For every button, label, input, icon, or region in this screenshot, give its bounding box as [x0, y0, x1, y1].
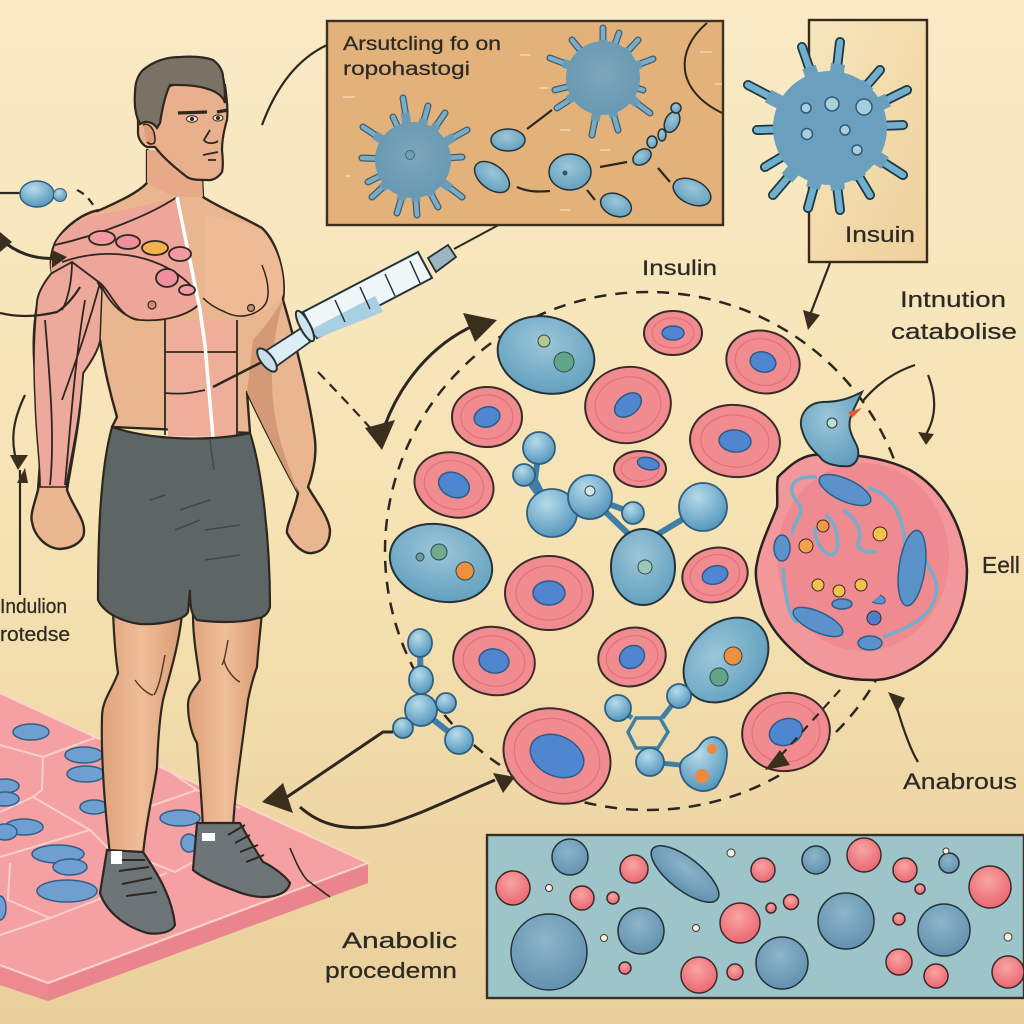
figure: athlete	[31, 57, 330, 934]
inset label: ropohastogi	[343, 58, 470, 80]
label: indulion protease	[0, 596, 70, 646]
inset cell: lower left	[362, 98, 467, 215]
shorts folds	[150, 440, 240, 560]
label: indulion protease: Indulion	[0, 596, 67, 618]
label: catabolise	[891, 287, 1017, 344]
nodules	[89, 231, 195, 295]
abdomen centre line	[177, 197, 213, 437]
pectoral outline	[203, 265, 268, 316]
body silhouette	[31, 150, 330, 553]
blue cell top-left	[489, 306, 603, 404]
blue spheres	[511, 836, 970, 990]
red cell	[719, 322, 807, 402]
muscle lines	[45, 197, 237, 485]
red cell	[676, 540, 754, 610]
hair	[135, 57, 225, 128]
label: catabolise: Intnution	[900, 287, 1006, 312]
muscle: arm	[34, 270, 102, 487]
red cell	[644, 311, 702, 355]
large cell	[756, 454, 967, 680]
cell cluster	[381, 306, 967, 821]
inset label	[343, 33, 501, 80]
brows and eyes	[178, 110, 228, 160]
panel: blood vessel	[487, 835, 1024, 998]
arrow: to inset	[262, 45, 327, 125]
blue cell right lower	[667, 601, 785, 719]
molecule lower-right	[605, 684, 727, 791]
red cell	[592, 620, 672, 694]
red spheres	[496, 838, 1024, 993]
shorts	[98, 427, 270, 624]
arrows	[0, 190, 934, 897]
molecule center	[513, 432, 727, 605]
red cell	[614, 451, 666, 487]
label: insuin: Insuin	[845, 222, 915, 247]
left leg	[102, 610, 182, 855]
label: indulion protease: rotedse	[0, 624, 70, 646]
arrowheads	[0, 232, 934, 813]
neck	[147, 150, 203, 197]
label: anabolic procedemn: procedemn	[325, 958, 457, 983]
label: anabolic procedemn: Anabolic	[342, 928, 457, 953]
red cell	[687, 401, 783, 481]
right pectoral	[205, 215, 283, 316]
muscle: abs	[165, 320, 238, 437]
ear	[143, 124, 155, 144]
syringe	[213, 207, 532, 387]
icon: insulin cell	[748, 42, 907, 210]
label: catabolise: catabolise	[891, 319, 1017, 344]
panel: tissue floor	[0, 693, 368, 1001]
face	[138, 82, 227, 180]
nipples	[148, 301, 254, 312]
red cell	[448, 620, 540, 702]
receptor	[801, 392, 862, 466]
molecule lower-left	[393, 629, 473, 754]
red cell	[505, 556, 593, 630]
icon: floating cell top-left	[20, 181, 66, 207]
panel: insulin callout	[748, 20, 927, 262]
right leg	[188, 612, 262, 830]
right shoe	[193, 823, 290, 897]
red cell	[488, 691, 626, 821]
red cell	[407, 444, 501, 526]
red cell	[736, 686, 836, 778]
inset label: Arsutcling fo on	[343, 33, 501, 55]
inset small cells	[469, 103, 715, 221]
label: insulin heading: Insulin	[642, 257, 717, 280]
label: anabrous: Anabrous	[903, 769, 1017, 794]
inset cell: upper	[550, 28, 653, 135]
small dots	[546, 848, 1012, 942]
blue cell left	[381, 513, 501, 613]
left shoe	[100, 850, 175, 934]
panel: phagocytosis inset	[327, 21, 723, 225]
label: eell: Eell	[982, 552, 1020, 578]
dashed circle	[385, 292, 911, 810]
red cell	[579, 360, 677, 450]
body shadow	[247, 300, 298, 493]
knee details	[135, 640, 240, 695]
label: anabolic procedemn	[325, 928, 457, 983]
inset arrows	[517, 110, 670, 200]
muscle: chest	[51, 197, 200, 320]
red cell	[452, 387, 522, 447]
